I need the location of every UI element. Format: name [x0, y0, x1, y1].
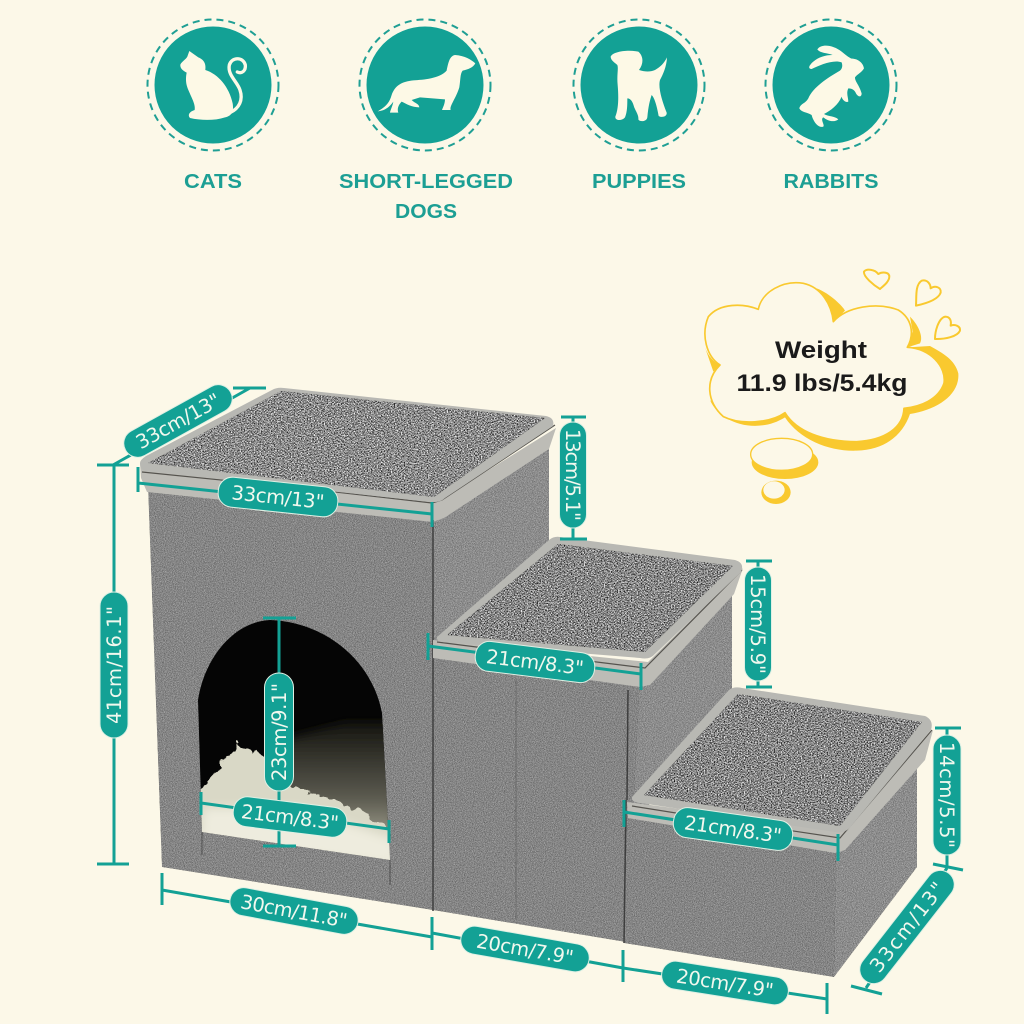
icon: dachshund badge [360, 20, 490, 150]
dimension: base length 20cm middle [432, 924, 623, 982]
lid frame of low box [632, 687, 932, 832]
small thought bubble [751, 438, 818, 479]
tiny thought bubble [761, 481, 791, 504]
dimension: base depth 33cm: 33cm/13" [865, 878, 950, 977]
text: weight: Weight [775, 337, 867, 364]
text: weight value: 11.9 lbs/5.4kg [736, 370, 908, 397]
dark seam middle box right [627, 690, 628, 800]
dimension: middle step height 15cm: 15cm/5.9" [746, 574, 769, 674]
seam between tall and middle box [432, 520, 434, 911]
dimension: base length 30cm: 30cm/11.8" [239, 890, 349, 933]
low step [624, 687, 933, 977]
carpet top of low box [644, 694, 922, 826]
dimension: top width 33cm: 33cm/13" [231, 481, 325, 514]
faint seam middle box [515, 680, 517, 920]
shading wedge left [705, 347, 721, 372]
lid gap shadow [142, 425, 555, 503]
illustration: three-step pet stairs [140, 388, 933, 977]
dimension: door width 21cm: 21cm/8.3" [240, 800, 340, 835]
dimension: top width 33cm [138, 467, 432, 527]
dimension: top step height 13cm: 13cm/5.1" [561, 429, 584, 521]
dimension: door height 23cm: 23cm/9.1" [268, 683, 291, 781]
icon: heart 3 [935, 317, 960, 339]
side face of low box [832, 766, 917, 977]
lid frame of middle box [437, 537, 742, 658]
front face of tall box [148, 485, 433, 910]
lid band of middle box [433, 568, 743, 687]
dimension: base length 20cm low [623, 959, 827, 1014]
dimension: middle step width 21cm [428, 633, 641, 690]
carpet top of tall box [148, 391, 545, 497]
lid frame of tall box [140, 388, 553, 502]
icon: puppy badge [574, 20, 704, 150]
dimension: low step height 14cm [933, 728, 963, 870]
carpet top of middle box [447, 544, 733, 652]
dimension: middle step width 21cm: 21cm/8.3" [485, 645, 585, 680]
lid gap shadow [437, 570, 742, 668]
icon: rabbit badge [766, 20, 896, 150]
dimension: top depth 33cm: 33cm/13" [132, 389, 224, 454]
icon: cat badge [148, 20, 278, 150]
label: rabbits: RABBITS [784, 170, 878, 193]
label: short-legged dogs: DOGS [395, 200, 457, 223]
dimension: top depth 33cm [97, 380, 266, 465]
icon: heart 2 [916, 280, 941, 306]
dimension: top step height 13cm [560, 417, 587, 539]
label: short-legged dogs: SHORT-LEGGED [339, 170, 513, 193]
dimension: middle step height 15cm [744, 561, 772, 687]
callout: weight cloud [705, 270, 960, 504]
dimension: base length 20cm low: 20cm/7.9" [675, 964, 775, 1003]
panel: suitable pets row [148, 20, 896, 223]
dimension: base length 30cm [162, 873, 432, 950]
dimension: low step width 21cm: 21cm/8.3" [683, 811, 783, 848]
tall step house [140, 388, 556, 910]
dimension: base depth 33cm [851, 865, 960, 994]
shading wedge right [907, 317, 921, 347]
dimension: base length 20cm middle: 20cm/7.9" [475, 930, 575, 969]
middle step [433, 520, 743, 942]
label: cats: CATS [184, 170, 242, 193]
icon: heart 1 [864, 270, 889, 289]
seam between middle and low box [624, 800, 626, 943]
shading wedge top [817, 288, 845, 322]
arched doorway with bed [198, 620, 396, 866]
dimension: low step width 21cm [624, 800, 838, 861]
dimension: total height 41cm: 41cm/16.1" [103, 606, 126, 724]
dimension: low step height 14cm: 14cm/5.5" [935, 742, 958, 848]
label: puppies: PUPPIES [592, 170, 686, 193]
front face of low box [624, 812, 836, 977]
label: short-legged dogs [339, 170, 513, 223]
lid band of tall box [140, 428, 556, 522]
side face of tall box [433, 440, 549, 665]
side face of middle box [628, 590, 732, 825]
seams [202, 832, 390, 885]
lid gap shadow [632, 730, 932, 838]
lid band of low box [627, 730, 933, 853]
dimension: door height 23cm [263, 618, 296, 846]
front face of middle box [433, 650, 640, 942]
dimension: total height 41cm [97, 465, 129, 864]
dimension: door width 21cm [201, 792, 389, 843]
